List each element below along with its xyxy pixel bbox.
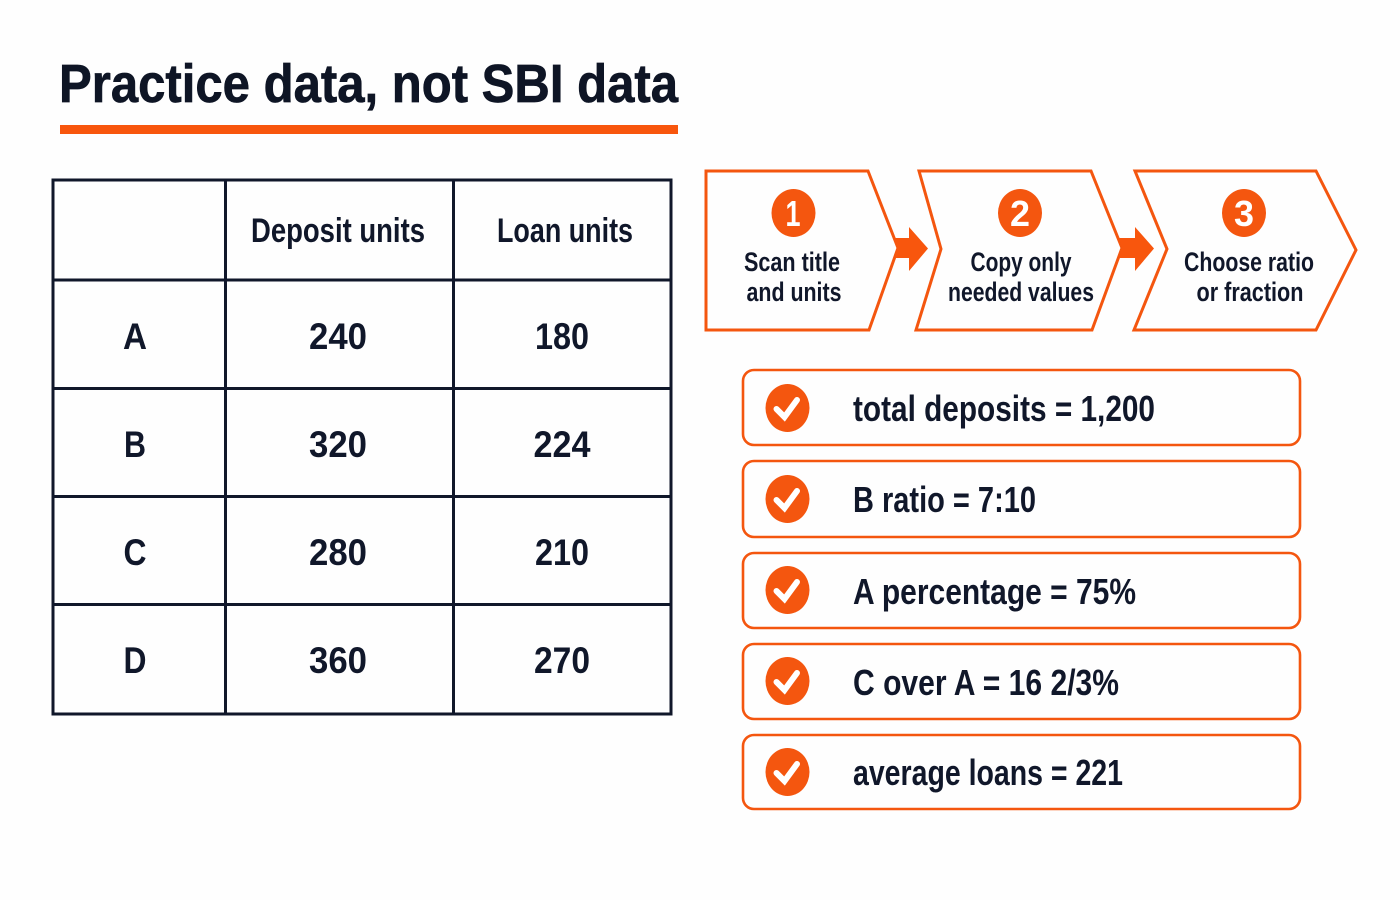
table rows: 180 xyxy=(535,316,589,357)
table rows: 270 xyxy=(534,640,590,681)
result: total deposits xyxy=(743,370,1300,445)
table rows: A xyxy=(123,316,147,357)
result: total deposits: total deposits = 1,200 xyxy=(853,388,1155,429)
step 1: scan title and units: 1 xyxy=(786,193,800,234)
result: C over A xyxy=(743,644,1300,719)
table rows xyxy=(123,316,591,681)
table rows: 240 xyxy=(309,316,367,357)
step 2: copy only needed values: 2 xyxy=(1010,193,1030,234)
step 2: copy only needed values: needed values xyxy=(948,277,1094,307)
table rows: 360 xyxy=(309,640,367,681)
data table xyxy=(53,180,671,714)
result: B ratio xyxy=(743,461,1300,537)
table rows: B xyxy=(124,424,146,465)
result: A percentage xyxy=(743,553,1300,628)
arrow: step 2 to 3 xyxy=(1119,227,1154,271)
result: average loans xyxy=(743,735,1300,809)
step 2: copy only needed values: Copy only xyxy=(970,247,1072,277)
title: Practice data, not SBI data xyxy=(59,54,679,114)
result: B ratio: B ratio = 7:10 xyxy=(853,479,1036,520)
table rows: 224 xyxy=(534,424,591,465)
step 1: scan title and units: Scan title xyxy=(744,247,840,277)
arrow: step 1 to 2 xyxy=(894,227,928,271)
table rows: C xyxy=(124,532,146,573)
result: C over A: C over A = 16 2/3% xyxy=(853,662,1119,703)
result: average loans: average loans = 221 xyxy=(853,752,1123,793)
table header: Loan units xyxy=(497,212,633,250)
step 2: copy only needed values xyxy=(916,171,1122,330)
table header: Deposit units xyxy=(251,212,425,250)
table rows: 280 xyxy=(309,532,367,573)
table rows: 210 xyxy=(535,532,589,573)
step 3: choose ratio or fraction: or fraction xyxy=(1196,277,1304,307)
title xyxy=(59,54,679,134)
step 3: choose ratio or fraction xyxy=(1134,171,1356,330)
step 1: scan title and units xyxy=(706,171,898,330)
table rows: 320 xyxy=(309,424,367,465)
table rows: D xyxy=(124,640,146,681)
table header xyxy=(251,212,633,250)
step 3: choose ratio or fraction: Choose ratio xyxy=(1184,247,1314,277)
step 3: choose ratio or fraction: 3 xyxy=(1234,193,1254,234)
step 1: scan title and units: and units xyxy=(746,277,842,307)
result: A percentage: A percentage = 75% xyxy=(853,571,1136,612)
